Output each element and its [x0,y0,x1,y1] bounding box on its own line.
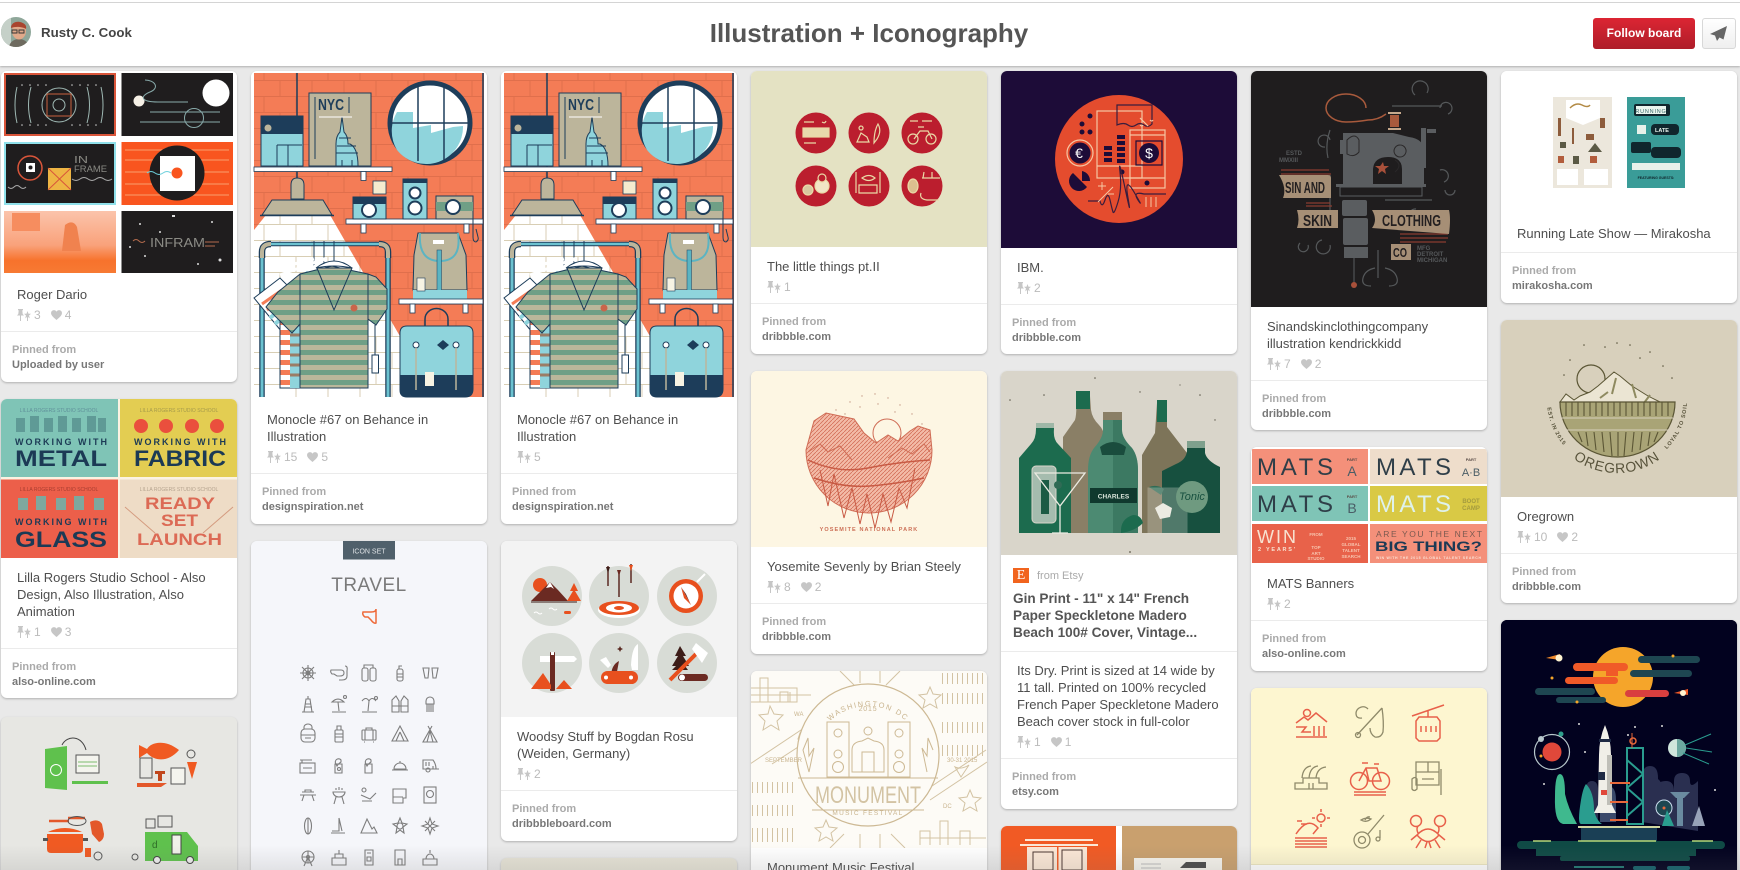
panel: pin MATS Banners [1251,447,1487,671]
pin source [1001,758,1237,800]
image: MATS banner grid: GLOBAL [1342,542,1361,547]
image: sewing machine badge: ESTD [1286,151,1303,157]
pin source [501,790,737,832]
image: Monument festival line art: WASHINGTON DC [826,700,908,720]
image: MATS banner grid: WIN WITH THE 2015 GLOBAL TALENT SEARCH [1376,556,1481,560]
image: six woodsy circles [501,541,737,717]
image: sewing machine badge: MICHIGAN [1417,258,1447,264]
image: MATS banner grid: A [1347,463,1357,479]
image: MATS banner grid: 2015 [1346,536,1357,541]
NYC lettering: NYC [568,97,594,114]
pin source: Pinned from [512,486,576,498]
pin source [501,473,737,515]
pin stats: 8 [784,580,791,594]
image: food icons [43,738,198,864]
image: sewing machine badge: SKIN [1303,213,1332,230]
pin source [1,648,237,690]
panel: pin orange and tan tiles [1001,826,1237,870]
image: Lilla Rogers four tiles [1,399,237,558]
NYC lettering: NYC [318,97,344,114]
pin title: Monocle #67 on Behance in Illustration [267,412,428,444]
avatar [1,17,31,47]
image: gin bottles: Tonic [1179,491,1205,503]
panel: pin food icons [1,717,237,870]
product title: Gin Print - 11" x 14" French [1013,591,1189,606]
image: MATS banner grid: TALENT [1342,548,1360,553]
panel: pin Gin Print [1001,371,1237,809]
image: Monument festival line art: 2015 [859,706,877,713]
image: MATS banner grid: WIN [1257,527,1296,547]
pin source: Pinned from [762,316,826,328]
image: Lilla Rogers four tiles: LAUNCH [137,530,222,549]
image: Lilla Rogers four tiles: LILLA ROGERS STUDIO SCHOOL [20,487,99,493]
image: Lilla Rogers four tiles: FABRIC [134,446,226,471]
product title: Beach 100# Cover, Vintage... [1013,625,1197,640]
pin stats [517,766,541,780]
image: Monument festival line art [751,671,987,848]
pin source [1,331,237,373]
pin source [251,473,487,515]
panel: pin travel icon set [251,541,487,870]
panel: pin IBM [1001,71,1237,354]
pin title: Yosemite Sevenly by Brian Steely [767,559,961,574]
image: IBM finance circle [1001,71,1237,248]
image: shop and paper tiles [1001,826,1237,870]
image: IBM finance circle: $ [1145,145,1153,161]
image: Lilla Rogers four tiles: WORKING WITH [15,517,107,527]
pin stats: 2 [1571,530,1578,544]
pin source: Pinned from [12,661,76,673]
image: rocket launch scene [1501,620,1737,870]
image: MATS banner grid: CAMP [1462,506,1480,512]
panel: pin The little things [751,71,987,354]
image: Lilla Rogers four tiles: LILLA ROGERS STUDIO SCHOOL [20,408,99,414]
product title: Paper Speckletone Madero [1013,608,1187,623]
image: Oregrown badge: OREGROWN [1575,452,1659,474]
image: Lilla Rogers four tiles: WORKING WITH [15,437,107,447]
pin source: dribbble.com [1512,581,1581,593]
image: Oregrown badge [1501,320,1737,497]
image: MATS banner grid: PART [1466,457,1477,462]
pin stats [1517,530,1578,544]
pin source: Pinned from [12,344,76,356]
panel: pin Yosemite [751,371,987,654]
image: travel icon set: TRAVEL [331,575,407,596]
image: MATS banner grid: 2 YEARS' [1258,547,1296,553]
pin stats: 10 [1534,530,1547,544]
image: gin bottles [1001,371,1237,555]
pin source [1501,252,1737,294]
pin title: Woodsy Stuff by Bogdan Rosu (Weiden, Germany) [517,729,694,761]
pin stats: 2 [1315,356,1321,370]
pin stats: 5 [534,450,541,464]
image: Yosemite badge: YOSEMITE NATIONAL PARK [820,527,918,533]
pin source: mirakosha.com [1512,280,1593,292]
panel: pin Running Late Show [1501,71,1737,303]
image: Lilla Rogers four tiles: READY [145,494,216,513]
top header bar [0,0,1740,66]
pin title: IBM. [1017,260,1044,275]
image: MATS banner grid: ARE YOU THE NEXT [1376,529,1482,539]
pin title: The little things pt.II [767,259,880,274]
pin stats [1017,280,1041,294]
image: two event posters: LATE [1655,128,1669,134]
pin stats: 2 [1034,280,1041,294]
pin title: Roger Dario [17,287,87,302]
pin stats [517,450,541,464]
pin source: Pinned from [512,803,576,815]
image: MATS banner grid: PART [1347,457,1358,462]
image: sewing machine badge: MMXIII [1279,158,1298,164]
image: sewing machine badge: CO [1393,245,1407,260]
pin stats: 3 [34,308,41,322]
image: nine line icons [1251,688,1487,864]
board title: Illustration + Iconography [710,18,1028,48]
pin source: Pinned from [1512,566,1576,578]
pin stats: 1 [1034,734,1041,748]
pin source: Pinned from [1012,317,1076,329]
image: Lilla Rogers four tiles: SET [161,511,199,530]
image: IBM finance circle: € [1075,145,1083,161]
pin stats [1267,596,1291,610]
pin stats: 1 [784,280,791,294]
image: Oregrown badge: LOYAL TO SOIL [1664,403,1687,449]
image: six Inframe tiles: IN [74,155,88,166]
pin source: dribbble.com [1262,408,1331,420]
panel: pin Oregrown [1501,320,1737,603]
Etsy badge [1013,568,1029,583]
image: sewing machine badge: DETROIT [1417,252,1444,258]
image: MATS banner grid: TOP [1311,545,1321,550]
pin source: Pinned from [1512,264,1576,276]
pin stats: 15 [284,450,297,464]
pin title: Monocle #67 on Behance in Illustration [517,412,678,444]
Etsy header and product title [1013,568,1197,640]
pin stats [1017,734,1071,748]
pin title: MATS Banners [1267,576,1354,591]
image: travel icon set [251,541,487,866]
pin source: also-online.com [12,676,96,688]
pin stats [17,308,72,322]
image: Lilla Rogers four tiles: LILLA ROGERS STUDIO SCHOOL [140,487,219,493]
pin source: dribbble.com [762,331,831,343]
image: Oregrown badge: EST. IN 2015 [1548,407,1566,444]
pin source: dribbble.com [1012,332,1081,344]
image: food icons: d [152,840,158,851]
image: two event posters [1501,72,1737,188]
pin source [1001,304,1237,346]
image: six Inframe tiles: INFRAM [150,235,205,250]
panel: pin rocket night scene [1501,620,1737,870]
image: MATS banner grid [1251,448,1487,563]
pin source: Pinned from [762,616,826,628]
pin source [1501,553,1737,595]
image: six Inframe tiles: FRAME [74,164,107,174]
panel: pin Sin and Skin [1251,71,1487,430]
pin stats: 2 [534,766,541,780]
pin source: designspiration.net [262,501,363,513]
pin stats: 5 [321,450,328,464]
follow button: Follow board [1607,26,1681,40]
pin stats [267,450,328,464]
image: Monument festival line art: SEPTEMBER [765,758,803,764]
image: Monument festival line art: MONUMENT [815,782,921,809]
pin source: dribbble.com [762,631,831,643]
product title [1013,591,1197,640]
pin source: also-online.com [1262,648,1346,660]
image: travel icon set: ICON SET [352,548,386,556]
image: sewing machine badge [1251,71,1487,307]
image: Lilla Rogers four tiles: WORKING WITH [134,437,226,447]
pin stats: 7 [1284,356,1291,370]
pin title: Running Late Show — Mirakosha [1517,226,1711,240]
image: MATS banner grid: BIG THING? [1375,538,1482,554]
pin stats: 4 [65,308,71,322]
image: MATS banner grid: A·B [1462,467,1480,479]
pin source: Pinned from [1262,633,1326,645]
description: Its Dry. Print is sized at 14 wide by 11 tall. Printed on 100% recycled French Paper Speckletone Madero Beach cover stock in full-color [1017,663,1219,729]
image: MATS banner grid: BOOT [1462,499,1480,505]
image: MATS banner grid: MATS [1257,491,1333,518]
pin stats [17,624,71,638]
pin source [751,303,987,345]
pin source: etsy.com [1012,786,1059,798]
pin stats [767,580,821,594]
pin source: Uploaded by user [12,359,104,371]
pin source: Pinned from [1262,393,1326,405]
image: MATS banner grid: MATS [1376,491,1451,518]
image: MATS banner grid: FROM [1309,532,1323,537]
pin title: Sinandskinclothingcompany illustration kendrickkidd [1267,319,1428,351]
image: sewing machine badge: SIN AND [1285,180,1325,197]
pin stats: 3 [65,624,71,638]
panel: pin Woodsy Stuff [501,541,737,841]
pin title: Oregrown [1517,509,1574,524]
image: Monocle shop wall illustration copy [501,72,737,398]
image: Monument festival line art: 30-31 2015 [947,758,978,764]
follow button [1593,18,1695,49]
pin card lower area [1251,864,1487,870]
pin source: dribbbleboard.com [512,818,612,830]
image: MATS banner grid: PART [1347,494,1358,499]
user name: Rusty C. Cook [41,25,132,40]
pin source: Pinned from [262,486,326,498]
image: MATS banner grid: B [1347,500,1357,516]
image: Yosemite badge [751,371,987,547]
image: Monocle shop wall illustration [251,72,487,398]
image: Lilla Rogers four tiles: METAL [15,446,107,471]
image: MATS banner grid: SEARCH [1341,554,1361,559]
image: Monument festival line art: DC [943,804,952,810]
panel: pin yellow line icons [1251,688,1487,870]
image: Monument festival line art: MUSIC FESTIVAL [832,810,904,817]
image: six red icon circles [751,71,987,247]
from Etsy: from Etsy [1037,570,1083,582]
pin stats: 2 [815,580,821,594]
image: two event posters: RUNNING [1635,109,1667,115]
pin source [751,603,987,645]
pin title: Lilla Rogers Studio School - Also Design, Also Illustration, Also Animation [17,570,206,619]
image: MATS banner grid: ART [1311,551,1321,556]
pin source: designspiration.net [512,501,613,513]
pin source [1251,620,1487,662]
image: MATS banner grid: MATS [1376,454,1451,481]
image: Lilla Rogers four tiles: GLASS [15,527,107,552]
Etsy badge: E [1017,568,1025,583]
panel: pin Lilla Rogers [1,399,237,698]
panel: pin Monocle 67 [251,71,487,524]
panel: pin Roger Dario [1,71,237,382]
pin stats: 1 [34,624,41,638]
image: two event posters: FEATURING GUESTS: [1638,176,1674,180]
pin source: Pinned from [1012,771,1076,783]
image: Monument festival line art: WA [794,712,803,718]
panel: pin Monument Music Festival [751,671,987,870]
panel: pin cropped beige card [501,858,737,870]
pin stats: 1 [1065,734,1071,748]
image: sewing machine badge: CLOTHING [1382,213,1441,230]
image: gin bottles: CHARLES [1098,494,1130,500]
pin stats: 2 [1284,596,1291,610]
image: Lilla Rogers four tiles: LILLA ROGERS STUDIO SCHOOL [140,408,219,414]
image: six Inframe tiles [1,72,237,273]
pin stats [767,280,791,294]
pin source [1251,380,1487,422]
pin stats [1267,356,1321,370]
image: MATS banner grid: MATS [1257,454,1333,481]
image: sewing machine badge: MFG [1417,246,1431,252]
panel: pin Monocle 67 repin [501,71,737,524]
image: MATS banner grid: STUDIO [1307,556,1325,561]
send button [1702,18,1736,49]
